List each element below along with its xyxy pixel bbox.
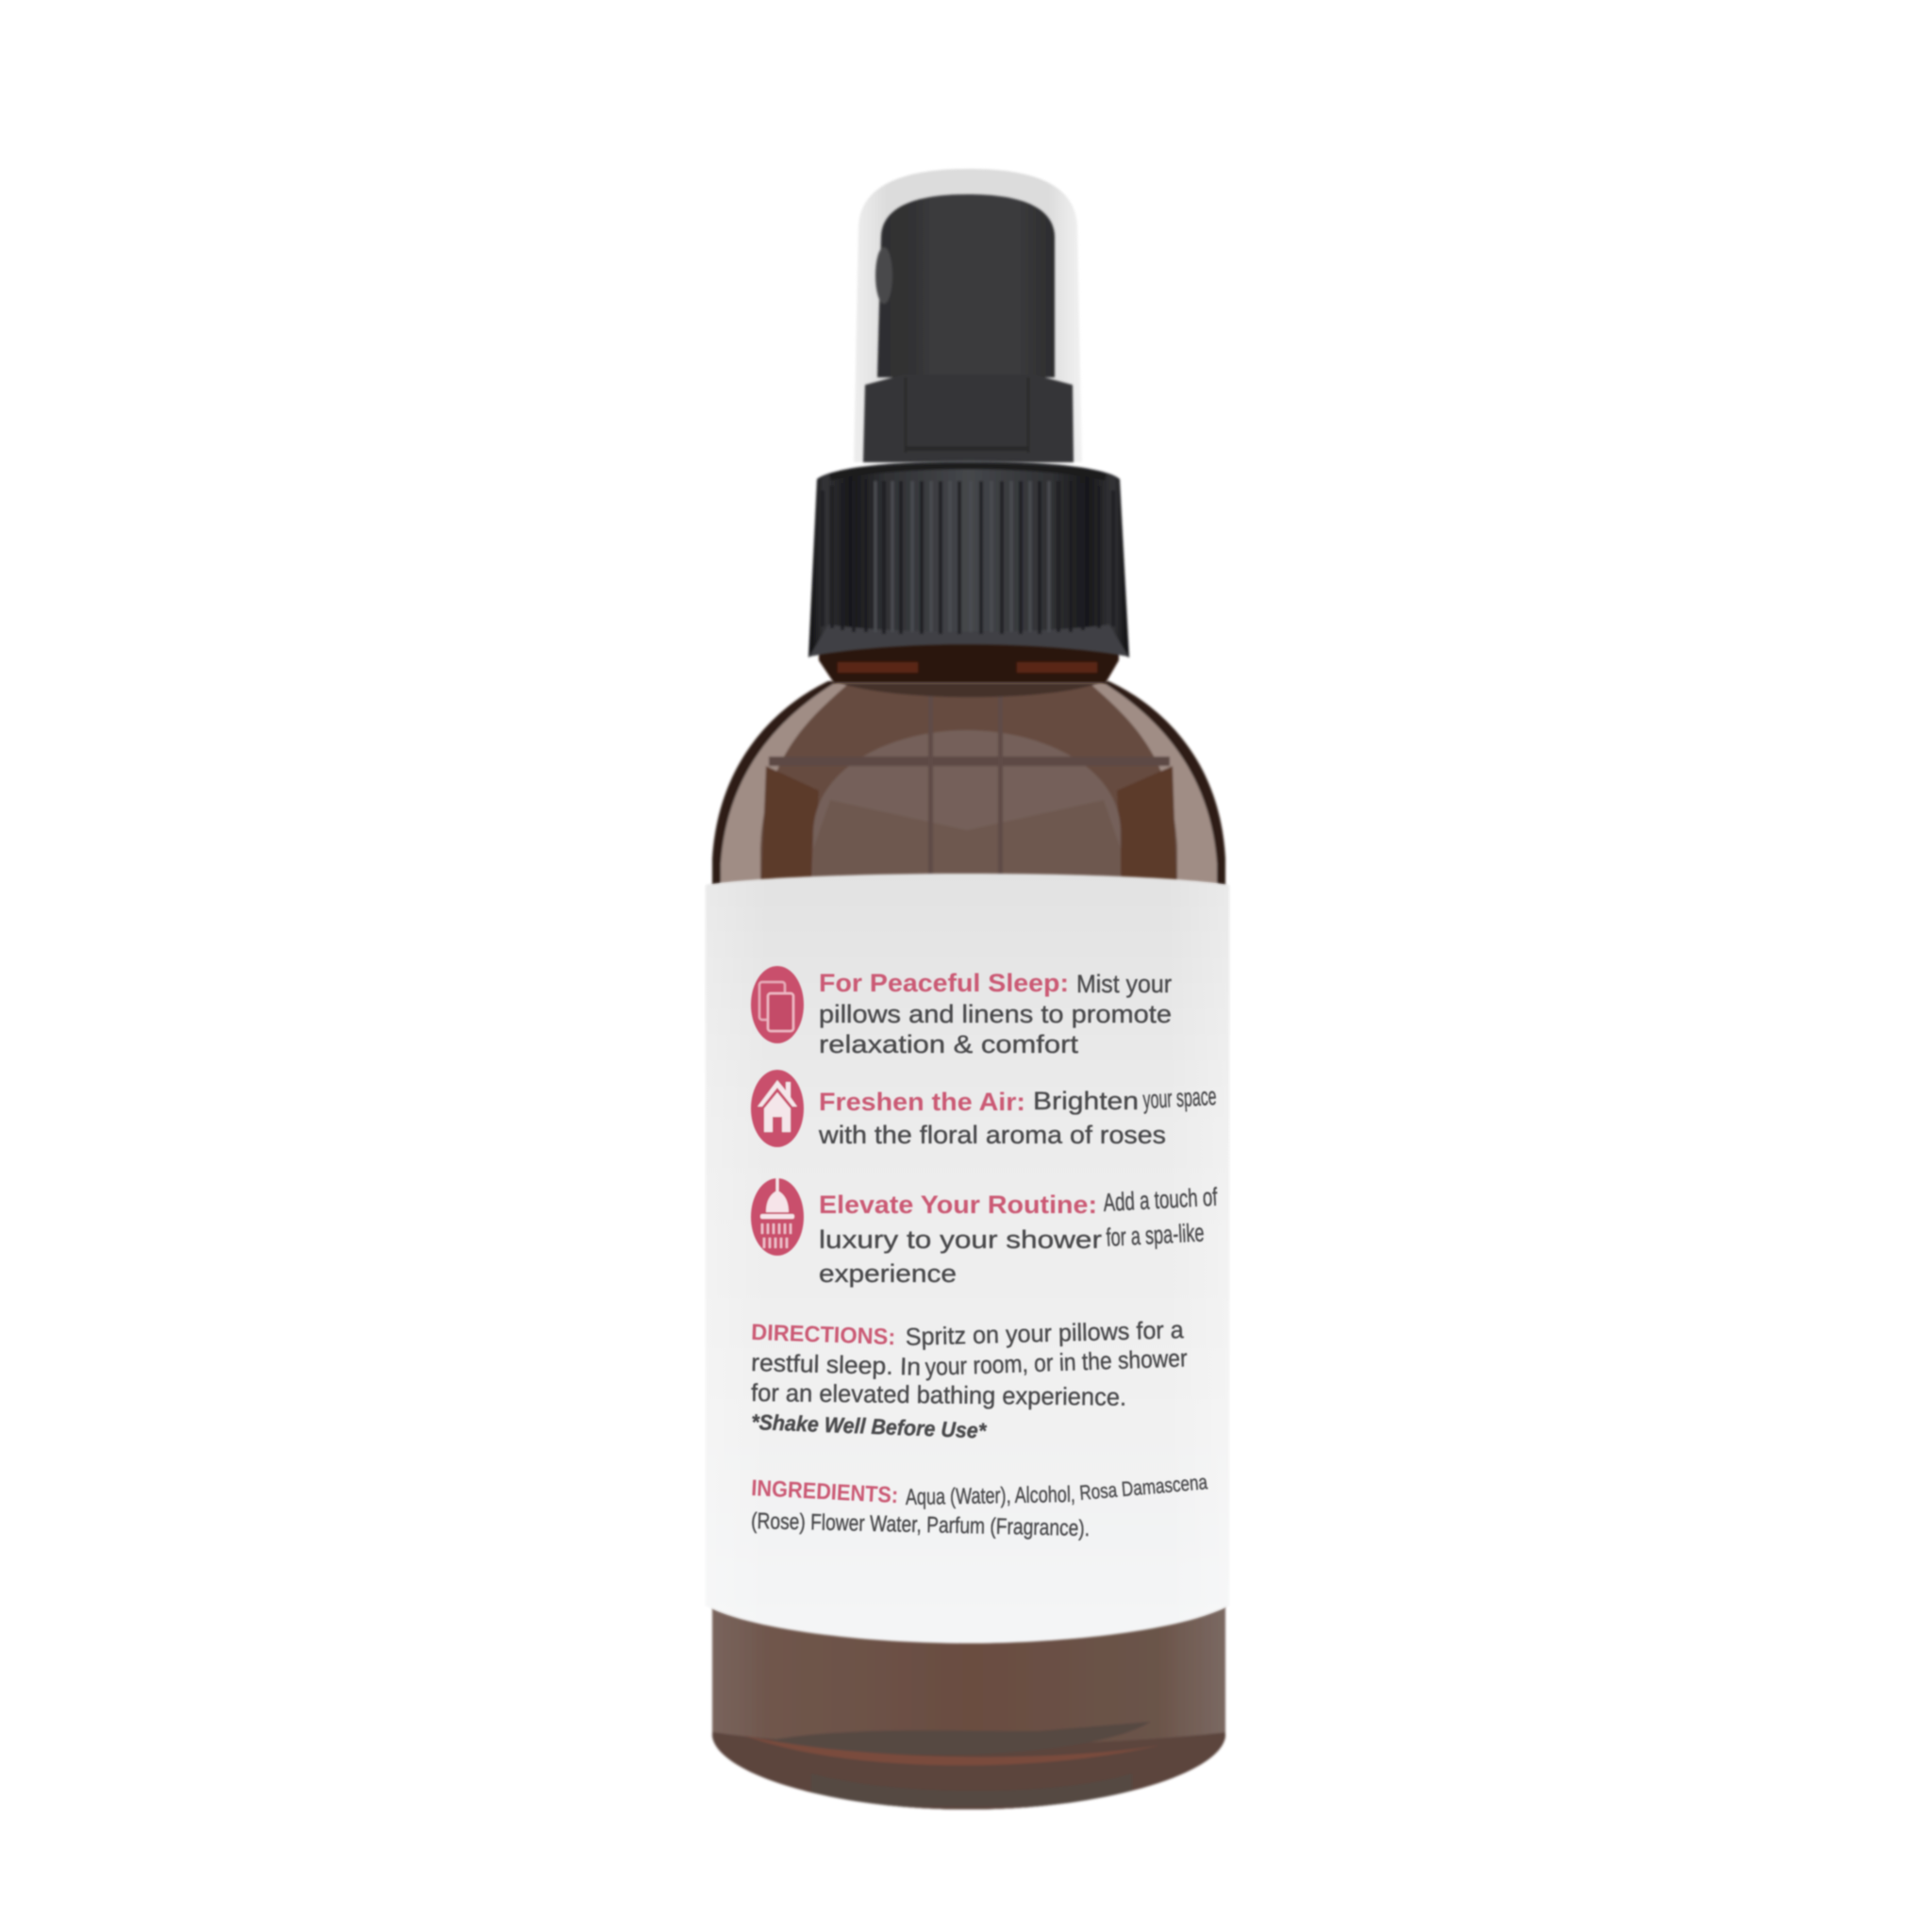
ribbed screw collar [808,460,1129,658]
benefit: peaceful sleep [751,966,1172,1058]
white back label [706,874,1229,1643]
directions block: restful sleep. In [751,1348,922,1381]
text: freshen the air: with the floral aroma of roses [818,1121,1166,1149]
icon: stacked pillows [751,966,804,1043]
text: for peaceful sleep: For Peaceful Sleep: [819,969,1069,997]
text: elevate your routine: luxury to your shower [819,1225,1102,1254]
text: elevate your routine [819,1183,1218,1288]
text: for peaceful sleep [819,969,1172,1058]
icon: house [751,1070,804,1147]
directions block: *Shake Well Before Use* [751,1409,988,1443]
directions block: your room, or in the shower [924,1343,1188,1381]
bottle neck [819,623,1119,683]
clear overcap [854,169,1082,462]
directions block [751,1315,1188,1443]
spray bottle illustration [706,169,1236,1821]
ingredients block: (Rose) Flower Water, Parfum (Fragrance). [751,1508,1090,1541]
black spray actuator [863,194,1074,462]
text: freshen the air: Brighten [1033,1087,1139,1115]
text: for peaceful sleep: relaxation & comfort [819,1030,1079,1058]
icon: shower head [751,1178,804,1256]
text: for peaceful sleep: Mist your [1076,970,1172,998]
text: elevate your routine: Elevate Your Routine: [819,1191,1097,1219]
ingredients block: INGREDIENTS: [751,1475,899,1508]
ingredients block [751,1470,1209,1541]
text: freshen the air: your space [1142,1082,1217,1114]
ingredients block: Aqua (Water), Alcohol, [906,1482,1075,1510]
label content [751,966,1218,1541]
benefit: freshen the air [751,1070,1217,1149]
directions block: for an elevated bathing experience. [751,1378,1126,1411]
text: elevate your routine: for a spa-like [1106,1219,1205,1252]
text: freshen the air [818,1082,1217,1149]
directions block: Spritz on your pillows for a [905,1315,1185,1351]
text: freshen the air: Freshen the Air: [819,1088,1025,1116]
text: for peaceful sleep: pillows and linens to promote [819,1000,1172,1028]
ingredients block: Rosa Damascena [1078,1470,1209,1505]
benefit: elevate your routine [751,1178,1218,1288]
text: elevate your routine: experience [819,1259,957,1288]
amber glass bottle body [708,681,1236,1821]
directions block: DIRECTIONS: [751,1320,896,1350]
text: elevate your routine: Add a touch of [1103,1183,1218,1217]
